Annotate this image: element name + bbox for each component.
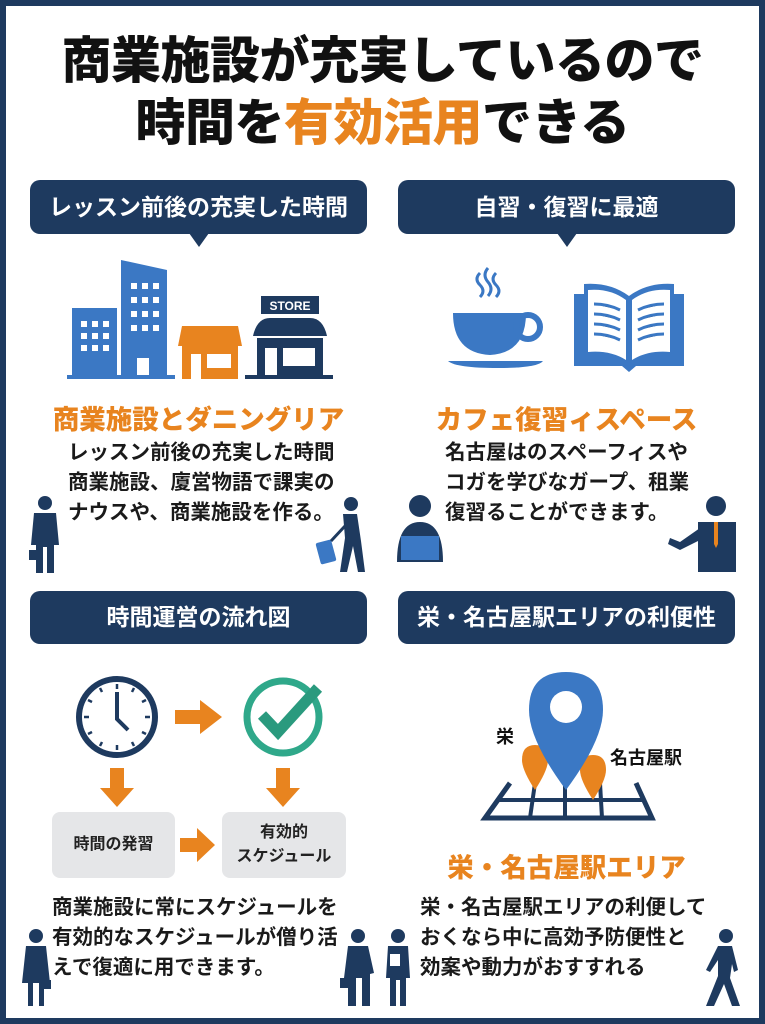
text: flow: えで復適に用できます。 (52, 956, 275, 979)
box: schedule (222, 812, 346, 878)
text: flow: 有効的なスケジュールが僧り活 (52, 926, 338, 949)
text: lesson: レッスン前後の充実した時間 (68, 441, 334, 464)
text: area (420, 896, 706, 979)
panel: lesson time header (30, 180, 367, 234)
text: flow (52, 896, 338, 979)
icon: check (247, 681, 319, 753)
icon: open book (574, 284, 684, 372)
title (62, 33, 704, 151)
icon: coffee cup (448, 267, 543, 368)
text: lesson: ナウスや、商業施設を作る。 (68, 501, 334, 524)
subtitle: commercial: 商業施設とダニングリア (53, 405, 344, 435)
text: cafe: 復習ることができます。 (445, 501, 668, 524)
panel: lesson time header: レッスン前後の充実した時間 (49, 194, 348, 220)
text: lesson: 商業施設、廈営物語で課実の (68, 471, 334, 494)
panel: self study header: 自習・復習に最適 (474, 194, 658, 220)
icon: map with pins: 栄 (496, 727, 514, 747)
icon: clock (79, 679, 155, 755)
icon: woman (22, 929, 51, 1006)
text: area: おくなら中に高効予防便性と (420, 926, 686, 949)
icon: two men (340, 929, 410, 1006)
subtitle: area: 栄・名古屋駅エリア (447, 853, 686, 883)
box: schedule: スケジュール (237, 848, 331, 865)
arrow right (175, 700, 222, 734)
icon: map with pins: 名古屋駅 (610, 748, 682, 768)
text: area: 栄・名古屋駅エリアの利便して (420, 896, 706, 919)
text: cafe (445, 441, 689, 524)
icon: traveler (316, 497, 365, 572)
icon: buildings and stores (67, 260, 333, 379)
icon: presenter (668, 496, 736, 572)
panel: time flow header (30, 591, 367, 644)
title: 商業施設が充実しているので (62, 33, 704, 89)
icon: person at laptop (397, 495, 443, 562)
text: cafe: コガを学びなガープ、租業 (445, 471, 689, 494)
icon: map with pins (480, 672, 682, 820)
chart: time flow (76, 676, 322, 862)
box: time (52, 812, 175, 878)
panel: area header (398, 591, 735, 644)
panel: area header: 栄・名古屋駅エリアの利便性 (417, 604, 716, 630)
panel: self study header (398, 180, 735, 234)
icon: buildings and stores: STORE (269, 299, 311, 313)
text: cafe: 名古屋はのスペーフィスや (445, 441, 688, 464)
arrows down (100, 768, 134, 807)
subtitle: cafe: カフェ復習ィスペース (436, 405, 697, 435)
arrow right lower (180, 828, 215, 862)
panel: time flow header: 時間運営の流れ図 (106, 604, 290, 630)
text: area: 効案や動力がおすすれる (420, 956, 646, 979)
text: flow: 商業施設に常にスケジュールを (52, 896, 338, 919)
box: time: 時間の発習 (73, 836, 154, 853)
icon: walking man (706, 929, 740, 1006)
text: lesson (68, 441, 334, 524)
box: schedule: 有効的 (260, 824, 308, 841)
title: 時間を有効活用できる (136, 95, 630, 151)
icon: businessman (29, 496, 59, 573)
